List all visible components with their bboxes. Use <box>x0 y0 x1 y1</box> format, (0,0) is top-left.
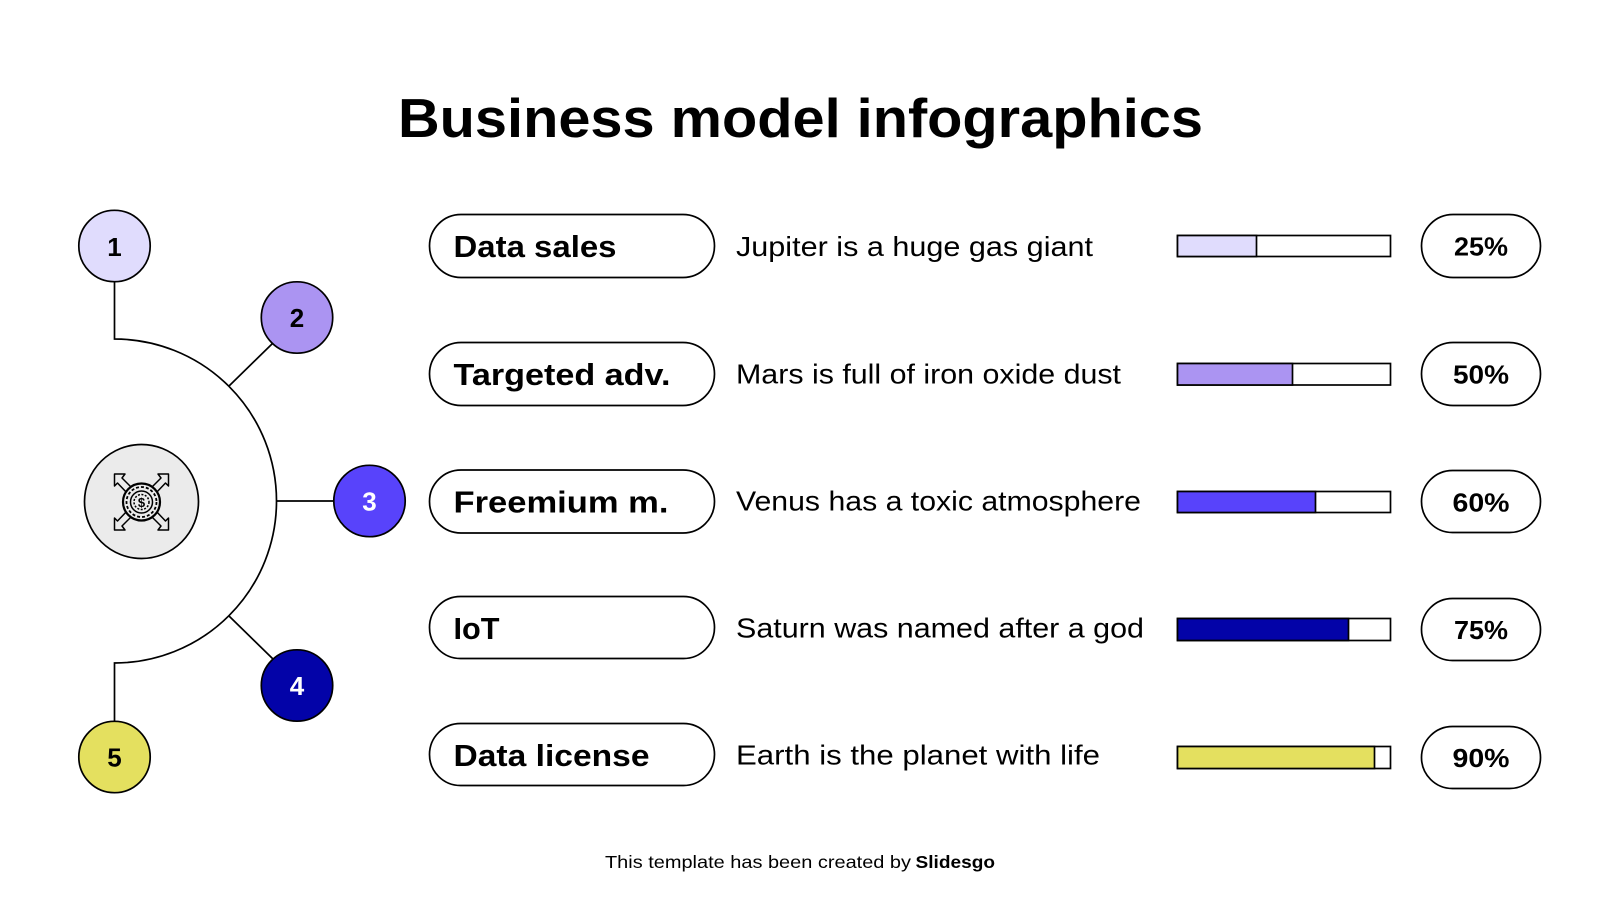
node 5 <box>79 721 150 793</box>
icon: coin with outward arrows <box>84 444 198 558</box>
label pill <box>430 342 714 406</box>
node 3: 3 <box>362 486 377 516</box>
label pill: Data sales <box>454 229 616 264</box>
progress bar 90% <box>1178 746 1390 768</box>
icon: coin with outward arrows: $ <box>138 495 146 510</box>
percent pill <box>1422 598 1540 660</box>
node 1: 1 <box>107 232 122 262</box>
progress bar 75% <box>1178 618 1390 640</box>
description: Earth is the planet with life <box>736 740 1100 770</box>
node 3 <box>334 465 405 537</box>
label pill <box>430 214 714 278</box>
percent pill <box>1422 214 1540 278</box>
node 2 <box>261 282 333 353</box>
description: Jupiter is a huge gas giant <box>736 231 1093 262</box>
percent pill: 60% <box>1452 488 1510 518</box>
node 5: 5 <box>107 742 122 772</box>
description: Mars is full of iron oxide dust <box>736 358 1121 390</box>
node 1 <box>79 210 150 282</box>
connector line to node 4 <box>229 616 273 659</box>
row 5: Data license <box>430 724 1540 788</box>
percent pill: 75% <box>1454 615 1508 645</box>
connector line to node 2 <box>229 343 273 386</box>
label pill <box>430 596 714 658</box>
description: Saturn was named after a god <box>736 612 1144 644</box>
label pill <box>430 724 714 786</box>
semicircle connector arc <box>114 282 276 721</box>
percent pill <box>1422 726 1540 788</box>
row 4: IoT <box>430 596 1540 660</box>
title: Business model infographics <box>398 87 1203 149</box>
progress bar 25% <box>1178 236 1390 256</box>
percent pill: 90% <box>1452 743 1510 773</box>
footer credit: This template has been created by <box>605 852 911 872</box>
label pill: Data license <box>454 738 650 773</box>
description: Venus has a toxic atmosphere <box>736 486 1141 516</box>
progress bar 50% <box>1178 364 1390 385</box>
node 4 <box>261 650 333 721</box>
progress bar 60% <box>1178 492 1390 512</box>
connector line to node 3 <box>277 500 334 502</box>
percent pill <box>1422 342 1540 406</box>
footer credit <box>605 852 995 872</box>
label pill: Targeted adv. <box>454 357 670 392</box>
row 1: Data sales <box>430 214 1540 278</box>
label pill <box>430 470 714 533</box>
node 2: 2 <box>290 303 304 333</box>
label pill: Freemium m. <box>454 484 668 520</box>
node 4: 4 <box>290 671 305 701</box>
percent pill: 25% <box>1454 232 1508 262</box>
percent pill: 50% <box>1453 360 1509 390</box>
footer credit: Slidesgo <box>916 852 995 872</box>
label pill: IoT <box>454 611 500 646</box>
percent pill <box>1422 470 1540 532</box>
row 3: Freemium m. <box>430 470 1540 533</box>
row 2: Targeted adv. <box>430 342 1540 406</box>
hub diagram <box>114 282 334 721</box>
